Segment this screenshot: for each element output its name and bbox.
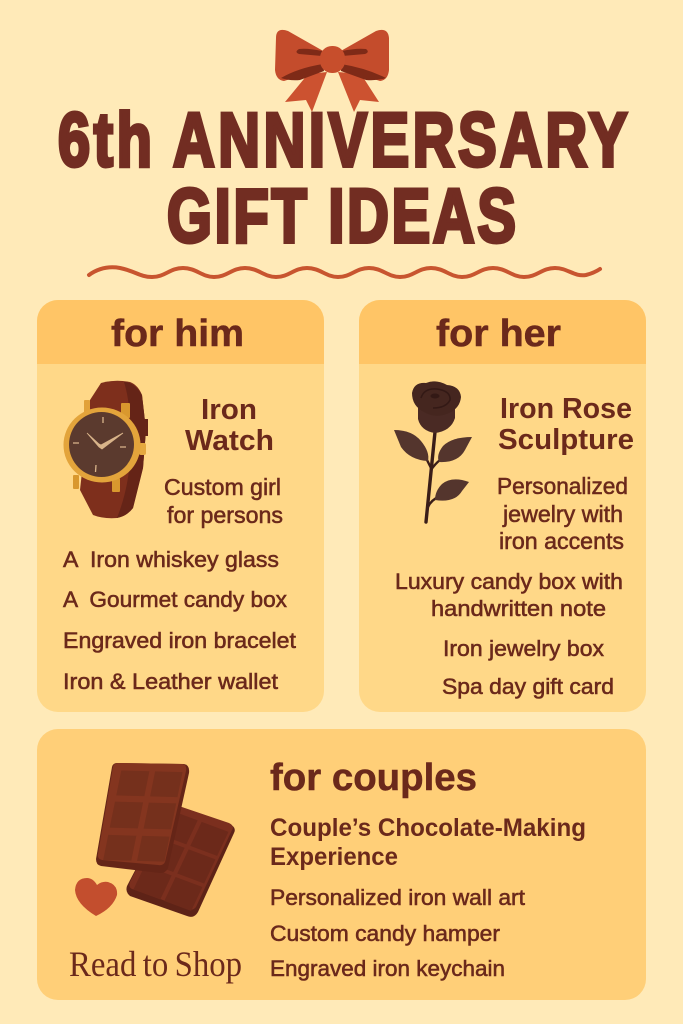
gift list: couples: Personalized iron wall art: [270, 885, 525, 910]
icon: wrist watch: [64, 381, 148, 518]
gift title: Iron Rose Sculpture: Iron Rose: [500, 393, 632, 425]
read to shop label: Read to Shop: [69, 944, 242, 984]
icon: chocolate bars: [96, 763, 235, 917]
panel: for him: [37, 300, 324, 712]
gift list: couples: Engraved iron keychain: [270, 956, 505, 981]
heading: for couples: for couples: [270, 757, 477, 799]
gift title: chocolate-making experience: [270, 814, 586, 871]
title: 6th ANNIVERSARY: [58, 98, 627, 183]
icon: heart: [75, 878, 117, 916]
panel header: for her: [359, 300, 646, 364]
gift list: her: Iron jewelry box: [443, 636, 604, 661]
gift title: chocolate-making experience: Couple’s Chocolate-Making: [270, 814, 586, 842]
gift description: iron accents: [499, 528, 624, 554]
icon: ribbon bow: [275, 30, 389, 112]
gift title: Iron Rose Sculpture: Sculpture: [498, 424, 634, 456]
gift list: her: [395, 569, 623, 699]
wavy divider: [89, 267, 600, 277]
panel: for her: [359, 300, 646, 712]
gift description: [497, 473, 628, 554]
gift list: him: Engraved iron bracelet: [63, 628, 296, 653]
gift list: couples: Custom candy hamper: [270, 921, 500, 946]
icon: iron rose: [394, 381, 472, 522]
panel: for couples: [37, 729, 646, 1000]
gift title: chocolate-making experience: Experience: [270, 843, 398, 871]
gift list: him: A Iron whiskey glass: [63, 547, 279, 572]
gift title: Iron Rose Sculpture: [498, 393, 634, 456]
gift description: for persons: [167, 502, 283, 528]
gift list: her: Luxury candy box with: [395, 569, 623, 594]
gift title: Iron Watch: Iron: [201, 394, 257, 426]
heading: for her: for her: [436, 313, 561, 355]
heading: for him: for him: [111, 313, 244, 355]
gift list: him: [63, 547, 296, 694]
panel header: for him: [37, 300, 324, 364]
gift description: [164, 474, 283, 528]
title: GIFT IDEAS: [167, 174, 516, 259]
gift description: Personalized: [497, 473, 628, 499]
title: [58, 98, 627, 259]
gift description: jewelry with: [502, 501, 623, 527]
gift description: Custom girl: [164, 474, 281, 500]
gift list: him: Iron & Leather wallet: [63, 669, 278, 694]
gift list: him: A Gourmet candy box: [63, 587, 287, 612]
gift list: her: Spa day gift card: [442, 674, 614, 699]
gift list: her: handwritten note: [431, 596, 606, 621]
gift list: couples: [270, 885, 525, 981]
gift title: Iron Watch: Watch: [185, 425, 274, 457]
gift title: Iron Watch: [185, 394, 274, 457]
